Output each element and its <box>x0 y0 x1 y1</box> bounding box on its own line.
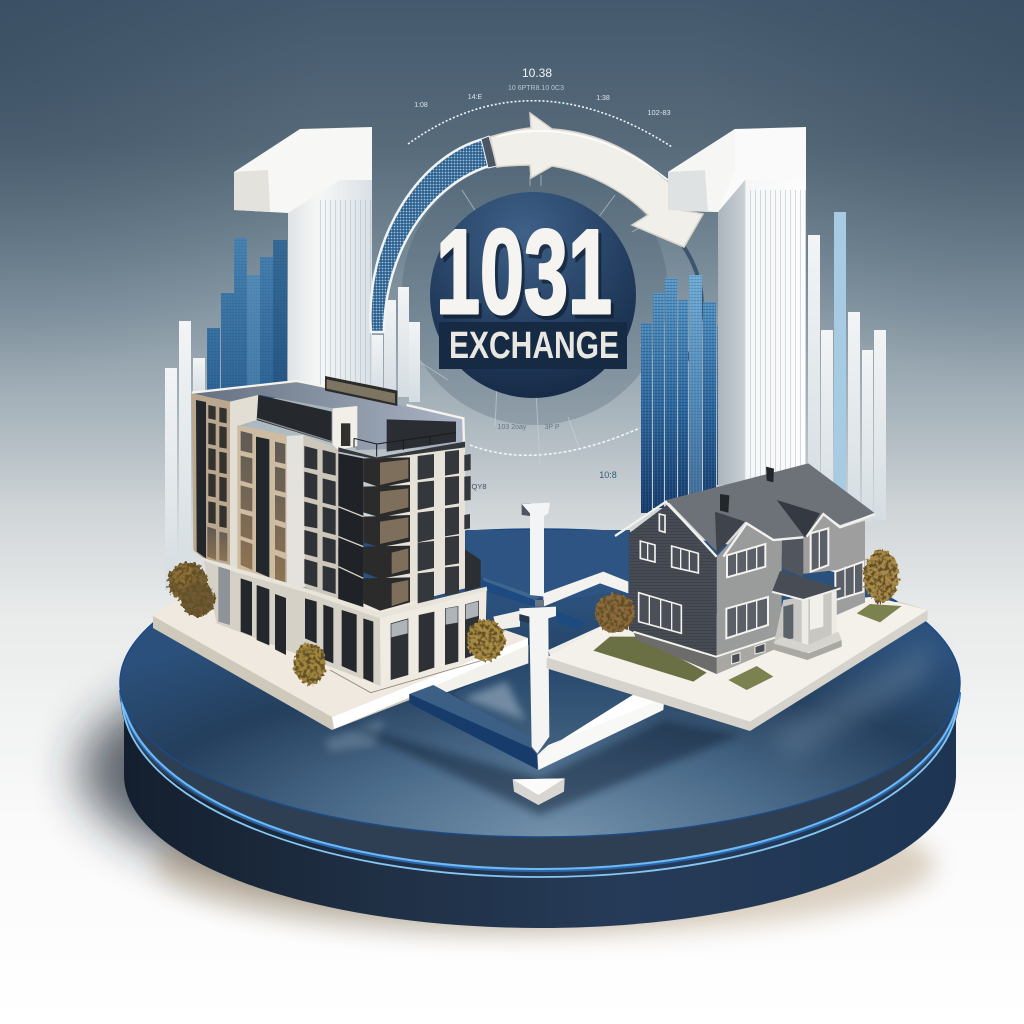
upper dashed scale arc with tick labels: 1:38 <box>596 95 610 102</box>
lower dashed scale arc with labels <box>470 424 640 491</box>
ground shadow <box>80 640 935 935</box>
inner dial behind the badge <box>402 159 702 464</box>
badge circle <box>430 192 636 398</box>
glazed balconies <box>363 457 410 611</box>
tree: left of building <box>168 562 215 617</box>
tree: right of house <box>863 550 899 604</box>
badge: 1031 exchange <box>430 192 636 398</box>
platform upper rim <box>121 680 959 872</box>
big numeral 1: left <box>234 127 372 395</box>
main roof <box>667 463 875 552</box>
house slab <box>547 602 928 731</box>
label strip <box>439 322 627 369</box>
dormers <box>715 512 745 554</box>
left wing <box>192 393 230 565</box>
navy frame band <box>409 685 537 769</box>
white frame band <box>537 687 664 770</box>
upper dashed scale arc with tick labels: 10 6PTR8.10 0C3 <box>508 85 564 92</box>
upper dashed scale arc with tick labels: 14:E <box>468 94 483 101</box>
ground floor <box>203 558 381 686</box>
upper dashed scale arc with tick labels <box>408 66 672 147</box>
tree: front of building <box>294 643 326 685</box>
main vertical stem <box>522 503 530 523</box>
exchange heading: EXCHANGE <box>449 325 619 367</box>
lower side path right <box>548 625 603 657</box>
basement windows <box>732 643 765 664</box>
right wing wall <box>802 515 865 615</box>
upper dashed scale arc with tick labels: 102-83 <box>647 108 671 117</box>
tree: right of building <box>467 619 505 661</box>
front windows <box>726 528 863 638</box>
front wall <box>717 524 782 658</box>
lower dashed scale arc with labels: QY8 <box>471 482 487 491</box>
roof trim <box>615 502 875 557</box>
balcony slab <box>338 442 465 459</box>
upper dashed scale arc with tick labels: 1:08 <box>414 102 428 109</box>
window mullions <box>648 531 854 635</box>
centre junction <box>535 600 544 607</box>
small arrowhead marker <box>513 778 565 805</box>
front surface reflections <box>325 640 935 815</box>
bar chart: left <box>165 238 420 590</box>
upper dashed scale arc with tick labels: 10.38 <box>522 66 552 80</box>
back surface sheen <box>466 530 630 600</box>
porch <box>773 592 837 653</box>
platform base <box>124 690 956 928</box>
1031 heading: 1031 <box>436 205 612 339</box>
ground outline <box>330 660 483 693</box>
light blue rim lines <box>121 689 959 877</box>
lower dashed scale arc with labels: 3P P <box>544 424 560 431</box>
apartment building model <box>192 376 487 693</box>
left wall windows <box>639 514 698 633</box>
reflective inner court <box>453 657 660 750</box>
white corner block <box>230 395 258 567</box>
house model <box>547 463 928 731</box>
rooftop box <box>325 376 397 406</box>
penthouse <box>257 395 332 443</box>
lower side path left <box>433 645 528 693</box>
bar chart: right <box>641 212 886 522</box>
foundation <box>717 637 780 674</box>
tree: left of house <box>595 593 635 633</box>
big numeral 1: right <box>668 127 806 485</box>
lawn: front <box>728 666 773 690</box>
1 numeral overlap on arrow <box>668 129 735 212</box>
chimneys <box>720 467 774 513</box>
base slab under apartment building <box>153 598 528 730</box>
black balcony section <box>338 453 363 610</box>
upper back path bands <box>482 577 540 607</box>
side facade <box>303 435 338 601</box>
1031 heading: 1031 <box>439 209 615 343</box>
1031 heading <box>436 205 615 343</box>
roof <box>192 382 463 450</box>
circular exchange arrow <box>370 113 703 332</box>
circular platform <box>120 529 960 928</box>
lawn: right <box>857 604 902 622</box>
lower right annex <box>465 549 481 592</box>
lower dashed scale arc with labels: 10:8 <box>599 470 617 480</box>
lawn: front left <box>593 637 707 682</box>
dark left wall <box>629 505 717 674</box>
lower dashed scale arc with labels: 103 2oay <box>498 424 527 431</box>
centre facade <box>237 425 287 587</box>
exchange paths between properties <box>409 503 664 770</box>
right facade <box>377 447 465 611</box>
white brick tower <box>287 435 305 587</box>
platform top surface <box>120 529 960 837</box>
